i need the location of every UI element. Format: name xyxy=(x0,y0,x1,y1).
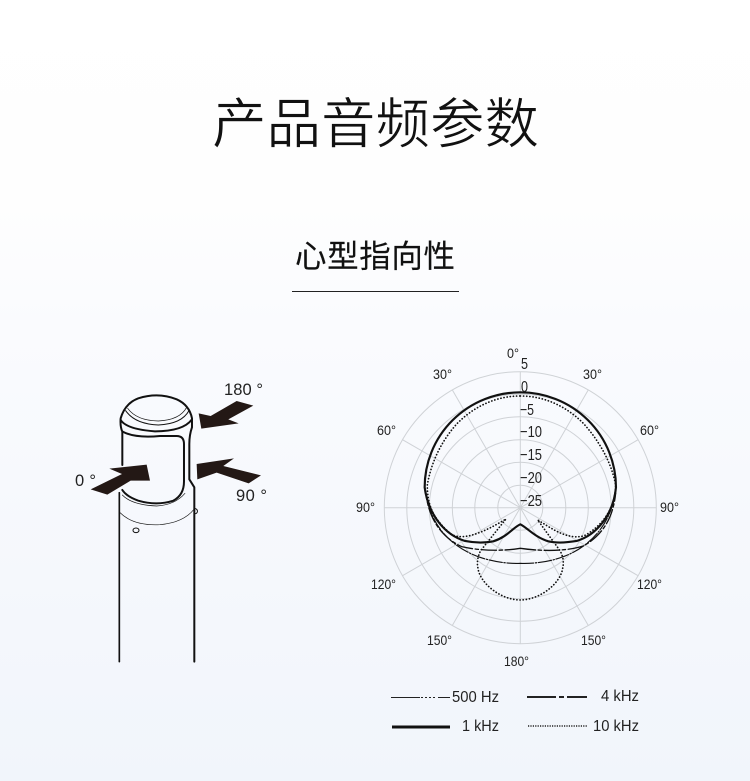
legend: 4 kHz xyxy=(527,688,639,705)
polar dB scale labels: −20 xyxy=(520,470,542,487)
polar dB scale labels: 0 xyxy=(521,379,528,396)
illustration: microphone with angle arrows xyxy=(91,395,261,662)
polar degree labels xyxy=(356,345,679,669)
legend: 500 Hz xyxy=(391,689,499,706)
curve: 1 kHz xyxy=(425,392,616,543)
curve: 10 kHz xyxy=(427,396,616,600)
polar degree labels: 60° xyxy=(640,422,659,438)
legend: 10 kHz: 10 kHz xyxy=(593,718,639,735)
polar degree labels: 120° xyxy=(371,576,396,592)
legend: 1 kHz xyxy=(392,718,499,735)
polar degree labels: 60° xyxy=(377,422,396,438)
polar degree labels: 120° xyxy=(637,576,662,592)
legend xyxy=(391,688,639,735)
legend: 1 kHz: 1 kHz xyxy=(462,718,499,735)
polar grid xyxy=(384,372,656,644)
polar degree labels: 180° xyxy=(504,653,529,669)
polar dB scale labels: −25 xyxy=(520,493,542,510)
legend: 10 kHz xyxy=(528,718,639,735)
polar degree labels: 0° xyxy=(507,345,519,361)
polar degree labels: 90° xyxy=(356,499,375,515)
subtitle: 心型指向性 xyxy=(295,238,455,274)
polar dB scale labels: −15 xyxy=(520,447,542,464)
polar dB scale labels: −10 xyxy=(520,424,542,441)
label: 90 degrees: 90 ° xyxy=(236,487,267,505)
legend: 500 Hz: 500 Hz xyxy=(452,689,499,706)
label: 0 degrees: 0 ° xyxy=(75,472,96,490)
polar degree labels: 150° xyxy=(427,632,452,648)
arrow: 180 degrees xyxy=(199,401,253,429)
arrow: 90 degrees xyxy=(197,458,261,483)
polar dB scale labels xyxy=(520,356,542,510)
curve: 4 kHz xyxy=(426,493,616,550)
polar degree labels: 30° xyxy=(583,366,602,382)
arrow: 0 degrees xyxy=(91,465,150,495)
label: 180 degrees: 180 ° xyxy=(224,381,263,399)
title: 产品音频参数 xyxy=(212,94,539,155)
polar dB scale labels: −5 xyxy=(520,402,534,419)
polar chart xyxy=(356,345,679,669)
polar degree labels: 90° xyxy=(660,499,679,515)
polar degree labels: 30° xyxy=(433,366,452,382)
microphone body xyxy=(119,395,197,662)
polar degree labels: 150° xyxy=(581,632,606,648)
subtitle underline xyxy=(292,291,459,292)
polar curves xyxy=(425,392,616,600)
legend: 4 kHz: 4 kHz xyxy=(601,688,639,705)
polar dB scale labels: 5 xyxy=(521,356,528,373)
curve: 500 Hz xyxy=(425,490,615,563)
